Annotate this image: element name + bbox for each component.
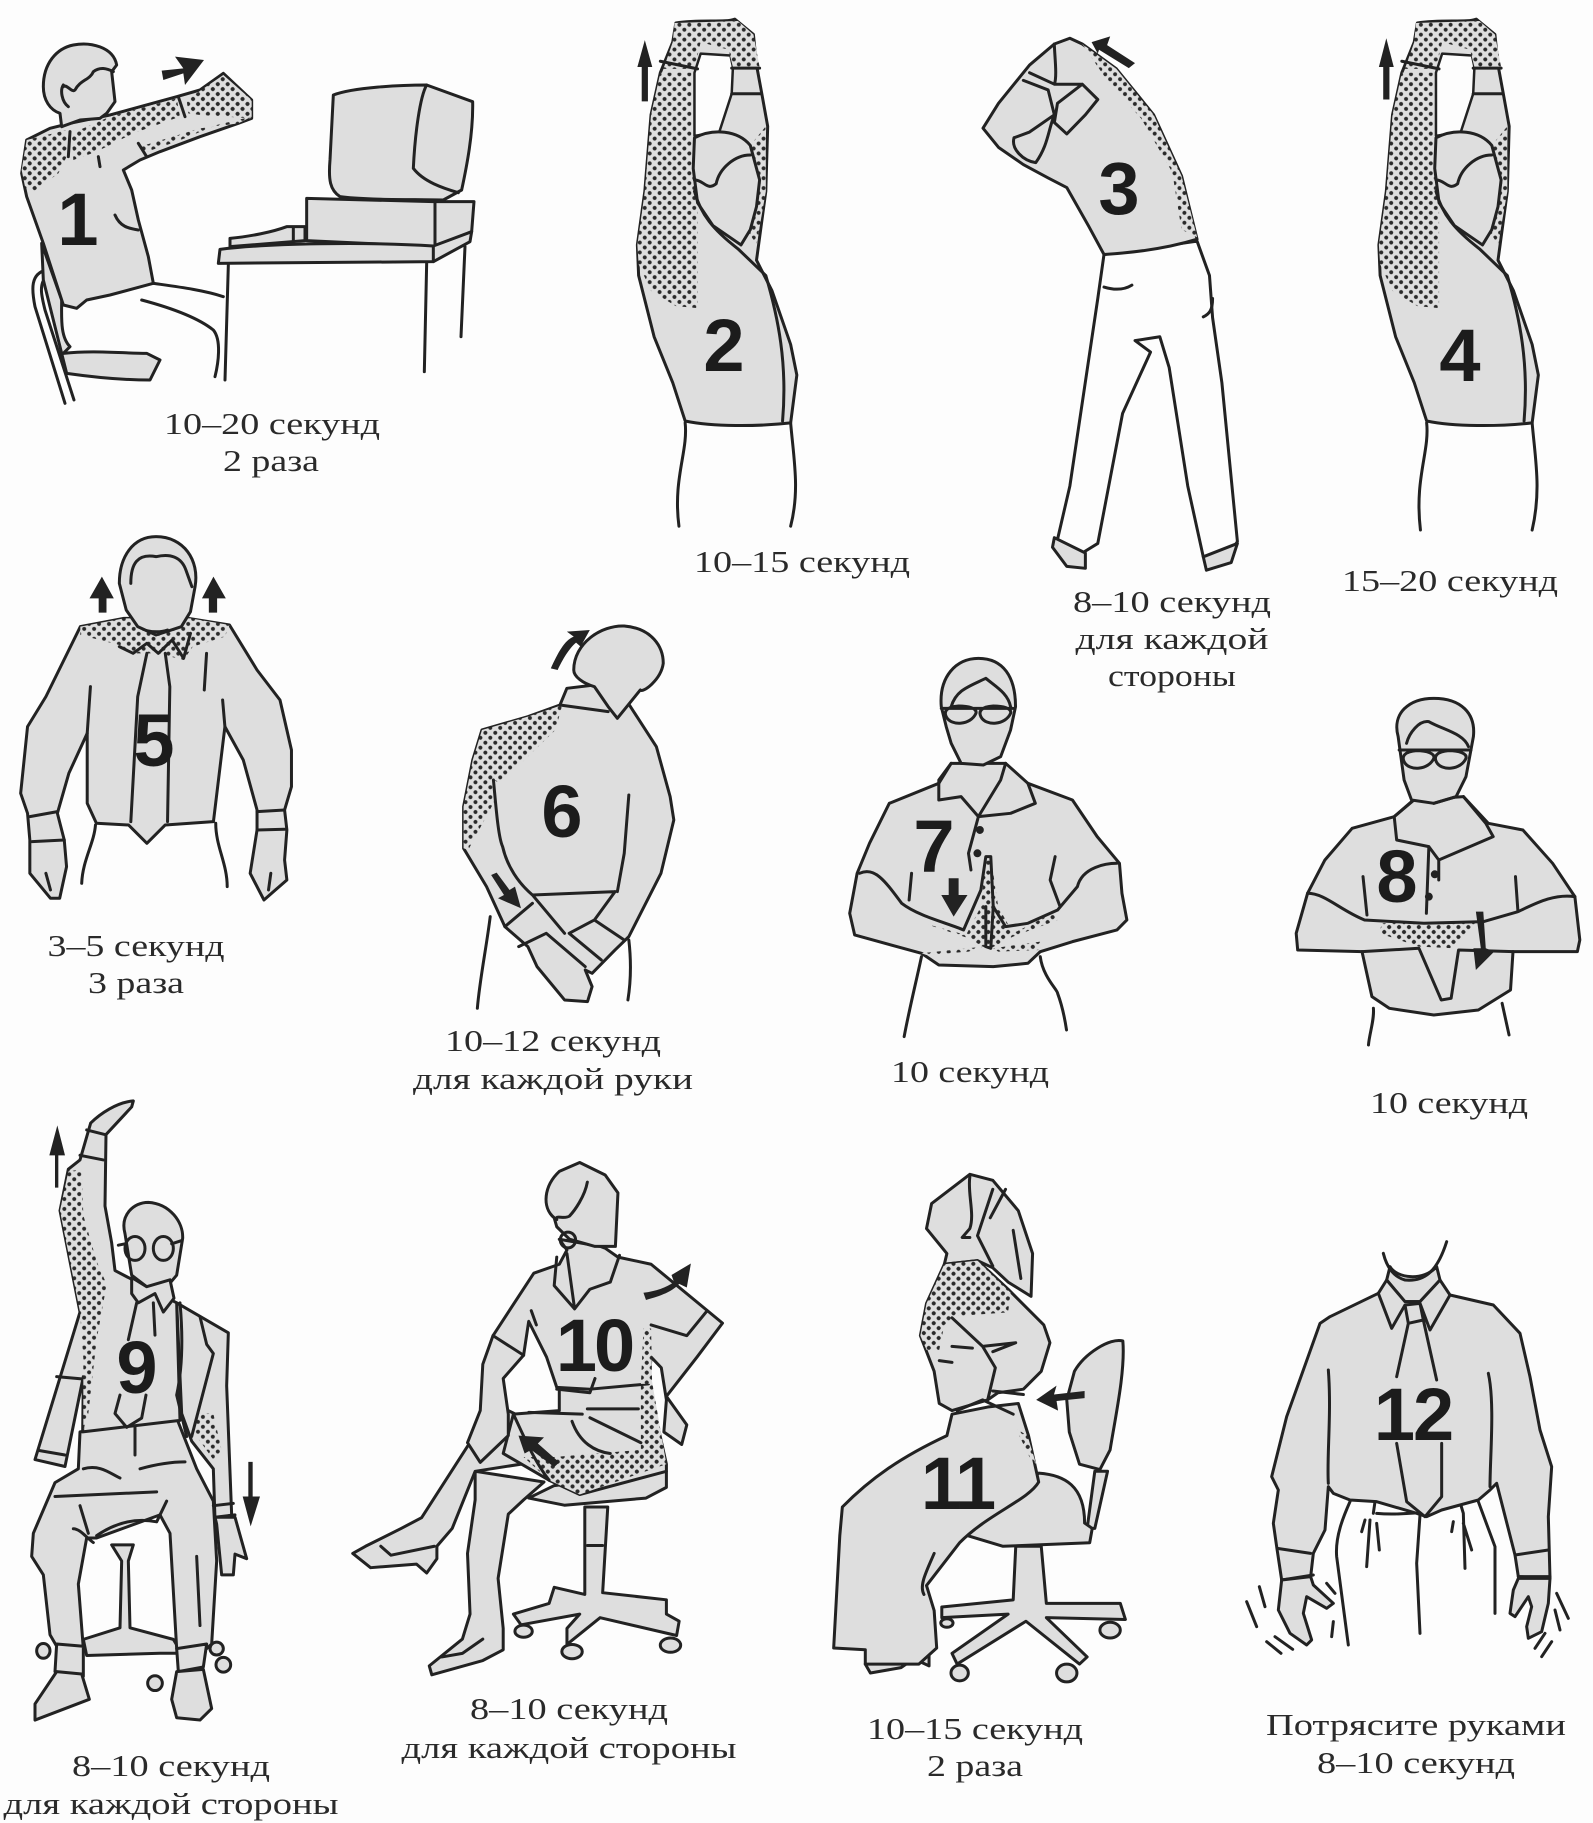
panel: exercise 10 (353, 1162, 722, 1675)
caption 4: 15–20 секунд (1342, 563, 1558, 598)
hands and shake marks (1247, 1577, 1568, 1657)
number 3: 3 (1098, 147, 1140, 230)
figure (21, 537, 291, 900)
torso (920, 1177, 1050, 1414)
head (118, 1202, 183, 1312)
arrow (1092, 36, 1135, 68)
figure (637, 19, 797, 526)
chair and legs (33, 243, 223, 403)
panel: exercise 9 (32, 1101, 260, 1720)
panel: exercise 6 (464, 626, 674, 1008)
caption 9: 8–10 секунд (72, 1748, 270, 1783)
caption 3: для каждой (1076, 621, 1268, 656)
caption 6: для каждой руки (413, 1061, 693, 1096)
raised arm and torso (35, 1101, 187, 1466)
number 8: 8 (1376, 835, 1418, 918)
figure (22, 44, 252, 308)
caption 9 (4, 1748, 339, 1821)
arrow (637, 40, 652, 101)
caption 1: 2 раза (223, 443, 319, 478)
number 6: 6 (541, 770, 583, 853)
number 11: 11 (921, 1442, 995, 1525)
arrows (90, 577, 226, 613)
jacket right side and hand (177, 1303, 247, 1575)
panel: exercise 2 (637, 19, 797, 526)
caption 11 (867, 1711, 1083, 1783)
caption 3 (1073, 584, 1271, 693)
caption 5: 3–5 секунд (48, 928, 225, 963)
panel: exercise 4 (1379, 19, 1538, 530)
caption 12 (1266, 1707, 1566, 1780)
head (546, 1162, 618, 1248)
number 1: 1 (57, 178, 99, 261)
caption 5 (48, 928, 225, 1000)
figure (1296, 698, 1580, 1045)
arrow (1036, 1386, 1085, 1411)
caption 1: 10–20 секунд (164, 406, 380, 441)
number 4: 4 (1439, 314, 1481, 397)
chair base (37, 1545, 231, 1691)
trousers and shoes (32, 1418, 217, 1720)
arrows (491, 630, 590, 908)
panel: exercise 7 (850, 658, 1127, 1037)
caption 10: для каждой стороны (402, 1730, 737, 1765)
arrow (1379, 38, 1394, 100)
shirt (1272, 1242, 1552, 1580)
panel: exercise 11 (834, 1174, 1125, 1682)
arrow (162, 57, 204, 85)
chair (941, 1340, 1125, 1682)
caption 7: 10 секунд (891, 1054, 1049, 1089)
panel: exercise 8 (1296, 698, 1580, 1045)
panel: exercise 12 (1247, 1242, 1568, 1657)
figure (850, 658, 1127, 1037)
caption 10 (402, 1691, 737, 1765)
arrow (941, 878, 968, 917)
hair (926, 1174, 1033, 1296)
caption 1 (164, 406, 380, 478)
arrows (49, 1125, 260, 1526)
number 12: 12 (1374, 1373, 1452, 1456)
robe and shoe (834, 1403, 1039, 1673)
caption 2: 10–15 секунд (694, 544, 910, 579)
computer monitor (218, 85, 474, 380)
chair (513, 1471, 681, 1659)
figure (1379, 19, 1538, 530)
number 2: 2 (703, 304, 745, 387)
arrow (1473, 912, 1494, 970)
trousers (1336, 1497, 1495, 1645)
caption 3: 8–10 секунд (1073, 584, 1271, 619)
number 10: 10 (556, 1304, 633, 1387)
caption 12: Потрясите руками (1266, 1707, 1566, 1742)
caption 12: 8–10 секунд (1317, 1745, 1515, 1780)
caption 11: 2 раза (927, 1748, 1023, 1783)
caption 6 (413, 1023, 693, 1096)
caption 3: стороны (1108, 658, 1236, 693)
arrows (518, 1264, 691, 1467)
panel: exercise 1 (22, 44, 474, 403)
number 9: 9 (116, 1326, 158, 1409)
number 5: 5 (133, 699, 175, 782)
caption 8: 10 секунд (1370, 1085, 1528, 1120)
number 7: 7 (913, 805, 955, 888)
caption 5: 3 раза (88, 965, 184, 1000)
caption 11: 10–15 секунд (867, 1711, 1083, 1746)
caption 10: 8–10 секунд (470, 1691, 668, 1726)
caption 6: 10–12 секунд (445, 1023, 661, 1058)
trousers (1052, 241, 1237, 570)
panel: exercise 5 (21, 537, 291, 900)
blouse and arms (468, 1239, 722, 1462)
figure (464, 626, 674, 1008)
panel: exercise 3 (983, 36, 1237, 570)
torso (983, 38, 1197, 254)
caption 9: для каждой стороны (4, 1786, 339, 1821)
legs and shoes (353, 1411, 559, 1675)
skirt (503, 1382, 666, 1495)
